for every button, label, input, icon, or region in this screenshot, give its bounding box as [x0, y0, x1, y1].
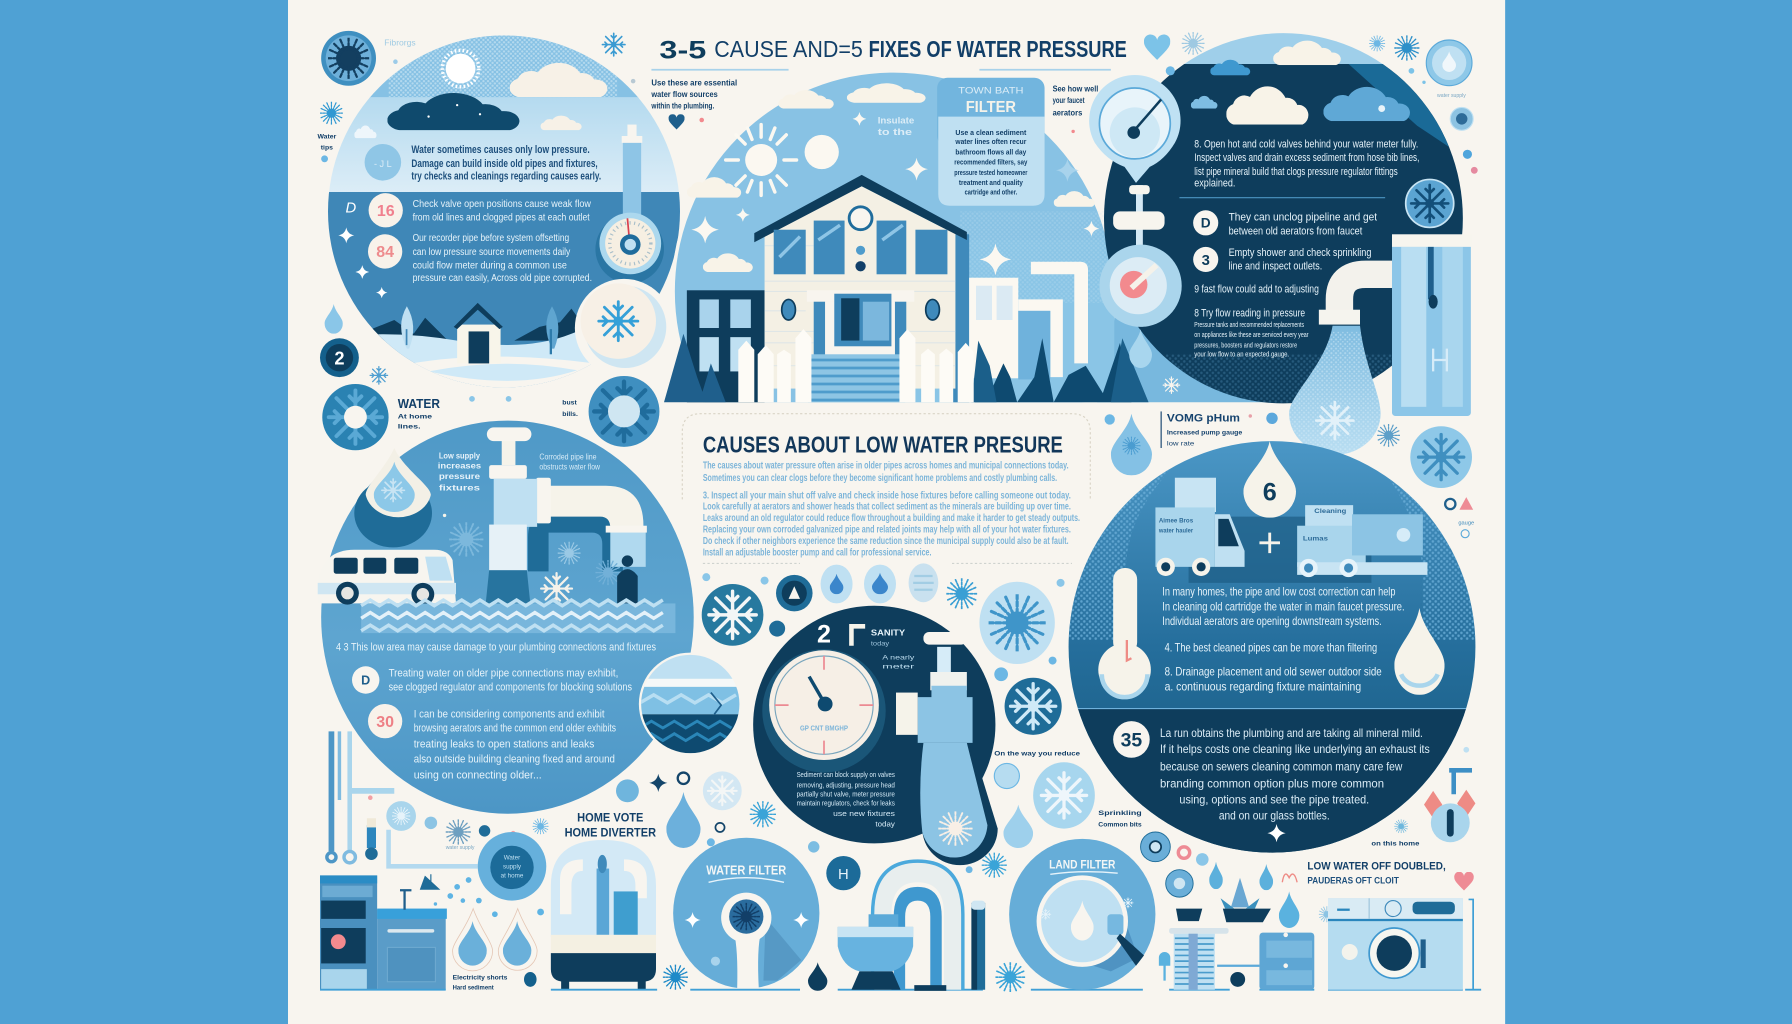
text block: fixes: Inspect valves and drain excess sediment from hose bib lines,: [1194, 152, 1419, 164]
cream cloud: [510, 63, 607, 97]
bus: [318, 550, 456, 606]
water label: lines.: [398, 424, 421, 431]
small house: [454, 303, 503, 363]
dotted rules: [703, 562, 1072, 564]
text on blue left: [438, 451, 482, 492]
truck left: [1155, 478, 1245, 576]
filter card: [937, 78, 1045, 206]
text block upper: In cleaning old cartridge the water in main faucet pressure.: [1162, 599, 1405, 613]
pink squiggle and heart: [1282, 872, 1474, 890]
water filter circle: [673, 838, 819, 990]
badge 35: [1113, 721, 1150, 758]
large gauge with pipe: [1089, 75, 1181, 251]
row of bubble icons: [702, 563, 1065, 664]
sub caption top: Use these are essential: [651, 79, 737, 88]
bathtub: [551, 840, 656, 990]
plus sign: [1259, 533, 1280, 553]
panel: right dark circle: [1097, 32, 1474, 457]
text block: see clogged regulator and components for blocking solutions: [389, 681, 632, 693]
text block in gauge circle: removing, adjusting, pressure head: [797, 780, 895, 789]
text block lower: La run obtains the plumbing and are taking all mineral mild.: [1160, 726, 1423, 740]
text block: intro: Water sometimes causes only low pressure.: [411, 144, 590, 156]
text block: intro: try checks and cleanings regarding causes early.: [411, 170, 601, 182]
text block upper: a. continuous regarding fixture maintaining: [1165, 679, 1361, 693]
tiny side caption: bust: [562, 400, 577, 407]
water spray: [1286, 326, 1383, 457]
truck left: water hauler: [1158, 528, 1194, 535]
small text block: pressures, boosters and regulators restore: [1194, 340, 1297, 349]
top left small icons: Water: [317, 133, 337, 140]
bracket label: today: [871, 641, 890, 648]
right caption top: your faucet: [1053, 96, 1085, 105]
glass ball: [1099, 245, 1182, 327]
right column icons: Common bits: [1098, 821, 1142, 828]
bracket label: [851, 626, 906, 648]
caption below drops: [453, 972, 537, 992]
title: 3-5: [659, 36, 706, 64]
letter D: D: [345, 201, 356, 217]
right column icons: [994, 657, 1209, 866]
top right small icons: water supply: [1437, 93, 1466, 99]
text block: numbered fixes: between old aerators from faucet: [1229, 225, 1362, 237]
title: FIXES OF WATER PRESSURE: [869, 36, 1127, 62]
badge circle lower left: [478, 832, 546, 901]
small text block: [1194, 320, 1309, 359]
inset water circle: [639, 653, 743, 755]
sun: [442, 50, 479, 87]
top right small icons: [1144, 32, 1478, 174]
text block: causes: could flow meter during a common use: [413, 261, 567, 272]
fence left: [738, 329, 811, 402]
paragraph: The causes about water pressure often arise in older pipes across homes and municipal connections today.: [703, 461, 1069, 472]
right buildings: [969, 262, 1088, 379]
panel: center gauge circle: [753, 606, 998, 865]
circles and pipe lower left: water supply: [446, 845, 475, 851]
tiny side caption: bills.: [562, 411, 578, 418]
right caption top: aerators: [1053, 108, 1083, 117]
sky caption: Insulate: [878, 115, 914, 125]
icon: drop left: [325, 304, 343, 334]
paragraph: Look carefully at aerators and shower heads that collect sediment as the minerals are building up over time.: [703, 502, 1071, 513]
faucet body: [896, 632, 998, 865]
text block in gauge circle: [797, 770, 895, 828]
heading home water: [565, 811, 656, 840]
panel: house scene: [664, 72, 1265, 402]
text block long: [414, 709, 616, 781]
truck right: Cleaning: [1314, 508, 1346, 515]
small text block: on appliances like these are serviced every year: [1194, 330, 1309, 339]
figure: [617, 555, 638, 603]
panel: causes text: [682, 414, 1090, 563]
radiator filter: [1159, 928, 1259, 990]
text block: numbered fixes: 9 fast flow could add to adjusting: [1194, 284, 1319, 296]
text block lower: branding common option plus more common: [1160, 776, 1384, 790]
text block: intro: Damage can build inside old pipes and fixtures,: [411, 158, 598, 170]
text block: numbered fixes: They can unclog pipeline and get: [1229, 212, 1377, 224]
filter card: treatment and quality: [959, 178, 1023, 187]
drop right: [1394, 608, 1445, 695]
gauge face: GP CNT BMGHP: [800, 723, 848, 732]
text block: fixes: list pipe mineral build that clogs pressure regulator fittings: [1194, 166, 1398, 178]
forest right: [975, 338, 1131, 402]
kitchen: [320, 874, 447, 990]
snow particles: [443, 514, 621, 604]
text block in gauge circle: maintain regulators, check for leaks: [797, 799, 895, 808]
gauge on tube: [595, 125, 664, 283]
text block lower: because on sewers cleaning common many care few: [1160, 759, 1402, 773]
water label: At home: [398, 413, 432, 420]
badge 3: [1193, 247, 1218, 272]
badge 16: 16: [377, 203, 395, 220]
title: [659, 36, 1127, 64]
badge 30: [368, 704, 402, 738]
drop and label near right circle: VOMG pHum: [1167, 413, 1240, 425]
truck right: Lumas: [1303, 536, 1328, 543]
text block long: also outside building cleaning fixed and around: [414, 753, 615, 765]
text block upper: 4. The best cleaned pipes can be more than filtering: [1165, 640, 1377, 654]
text block in gauge circle: partially shut valve, meter pressure: [797, 790, 895, 799]
text block: numbered fixes: line and inspect outlets.: [1229, 261, 1322, 273]
sub caption top: water flow sources: [651, 90, 718, 99]
drop with number 6: 6: [1263, 479, 1277, 507]
paragraph: [703, 461, 1080, 558]
text line with number: 4 3 This low area may cause damage to your plumbing connections and fixtures: [336, 641, 656, 653]
stairs: [808, 354, 905, 402]
sky caption: [878, 115, 914, 137]
pipe elbow: [1339, 274, 1393, 315]
text block: causes: from old lines and clogged pipes at each outlet: [413, 213, 590, 224]
paragraph: 3. Inspect all your main shut off valve and check inside hose fixtures before calling someone out today.: [703, 490, 1071, 501]
text block: causes: can low pressure source movements daily: [413, 247, 571, 258]
text on blue left: Low supply: [439, 451, 481, 460]
icon circle: - J L: [374, 159, 392, 169]
text block long: I can be considering components and exhibit: [414, 709, 605, 721]
badge 3: 3: [1202, 253, 1210, 269]
small text block: Pressure tanks and recommended replacements: [1194, 320, 1304, 329]
sun with rays: [726, 125, 797, 195]
bracket label: SANITY: [871, 628, 906, 637]
text block upper: In many homes, the pipe and low cost correction can help: [1162, 584, 1396, 598]
text on blue right: obstructs water flow: [539, 463, 600, 472]
icon circle: [365, 144, 401, 181]
filter card: bathroom flows all day: [955, 147, 1027, 156]
text block lower: [1160, 726, 1430, 822]
snow crystal: [1163, 377, 1180, 393]
filter card: TOWN BATH: [958, 86, 1023, 96]
small text block: your low flow to an expected gauge.: [1194, 350, 1289, 359]
sky caption: to the: [878, 127, 912, 137]
heading home water: HOME DIVERTER: [565, 826, 656, 840]
panel: big right circle: [1069, 441, 1480, 857]
badge 2: [1193, 210, 1218, 235]
plant and bowls: [1166, 862, 1335, 928]
truck left: Aimee Bros: [1159, 517, 1194, 524]
badge D: [352, 666, 379, 694]
right caption top: [1053, 84, 1098, 133]
filter card: Use a clean sediment: [955, 128, 1027, 137]
low water caption: PAUDERAS OFT CLOIT: [1307, 875, 1399, 885]
water basin: [838, 927, 913, 990]
divider: [1179, 197, 1385, 199]
nozzle: [1319, 310, 1360, 325]
outlined drops: [453, 909, 537, 971]
text block: intro: [411, 144, 601, 182]
wheel icon: [589, 376, 659, 447]
thermometer: [1098, 568, 1151, 697]
title: CAUSE AND=5: [714, 36, 863, 62]
text block: fixes: explained.: [1194, 177, 1235, 189]
drop under ball: [1129, 329, 1152, 368]
drop with number 6: [1243, 441, 1296, 518]
text block: Treating water on older pipe connections may exhibit,: [389, 668, 618, 680]
top left small icons: Fibrorgs: [384, 38, 416, 48]
snowflake plate: [575, 279, 673, 377]
falling water: [486, 570, 530, 603]
filter card: cartridge and other.: [965, 187, 1017, 196]
land filter circle: LAND FILTER: [1049, 858, 1116, 872]
text on blue right: [539, 452, 600, 472]
plus: [653, 609, 671, 627]
badge: number 2: 2: [334, 348, 345, 369]
text block long: browsing aerators and the common end older exhibits: [414, 722, 616, 734]
side caption: A nearly: [882, 654, 915, 661]
text on blue left: pressure: [439, 472, 481, 481]
mountain trees: [401, 306, 558, 354]
badge 30: 30: [376, 714, 394, 731]
paragraph: Leaks around an old regulator could reduce flow throughout a building and make it harder to get steady outputs.: [703, 513, 1080, 524]
spiky icons: [966, 853, 1025, 992]
drop and label near right circle: low rate: [1167, 441, 1195, 448]
forest left: [664, 334, 726, 402]
text block: numbered fixes: [1194, 212, 1377, 320]
water label: WATER: [398, 397, 440, 411]
water label: [398, 397, 440, 431]
tools left: [327, 731, 394, 863]
drop icon: [354, 448, 432, 547]
low water caption: [1307, 861, 1446, 885]
filter card: pressure tested homeowner: [954, 168, 1027, 177]
drop and label near right circle: Increased pump gauge: [1167, 429, 1242, 436]
water waves: [361, 600, 675, 633]
text block: numbered fixes: 8 Try flow reading in pressure: [1194, 308, 1305, 320]
badge circle lower left: Water: [504, 854, 520, 861]
top left small icons: tips: [321, 145, 333, 152]
text block: causes: [413, 199, 592, 284]
land filter circle: [1009, 839, 1155, 990]
badge 35: 35: [1121, 729, 1142, 751]
text block in gauge circle: Sediment can block supply on valves: [797, 770, 895, 779]
right column icons: Sprinkling: [1098, 810, 1142, 817]
truck right: [1297, 505, 1427, 577]
filter panel: [1259, 933, 1314, 990]
right margin icons: on this home: [1371, 841, 1420, 848]
badge 2: D: [1201, 215, 1211, 230]
low water caption: LOW WATER OFF DOUBLED,: [1307, 861, 1446, 873]
paragraph: Replacing your own corroded galvanized pipe and related joints may help with all of your hot water fixtures.: [703, 525, 1071, 536]
spiky and flower right: [1377, 424, 1472, 501]
text block: [389, 668, 632, 693]
right column icons: On the way you reduce: [994, 750, 1080, 757]
right margin icons: gauge: [1458, 521, 1474, 527]
small icons center lower: [616, 771, 827, 991]
base lines: [320, 989, 1481, 991]
text block upper: 8. Drainage placement and old sewer outdoor side: [1165, 664, 1382, 678]
snowflake small: [370, 367, 388, 384]
title underlines: [651, 69, 1111, 71]
text block in gauge circle: today: [875, 819, 895, 828]
badge 84: 84: [376, 244, 394, 261]
filter card: FILTER: [966, 99, 1016, 116]
clouds on dark circle: [1191, 41, 1410, 125]
filter card: recommended filters, say: [954, 158, 1028, 167]
moon disc: [805, 135, 839, 169]
badge 84: [368, 234, 402, 269]
side caption: [882, 654, 916, 671]
sparkles: [338, 227, 387, 298]
circles and pipe lower left: [365, 795, 549, 866]
faucet arch: [869, 859, 965, 991]
text block: fixes: 8. Open hot and cold valves behind your water meter fully.: [1194, 138, 1418, 150]
caption below drops: Hard sediment: [453, 985, 494, 992]
tiny side caption: [469, 396, 578, 418]
text block upper: [1162, 584, 1405, 693]
side caption: meter: [882, 664, 916, 671]
heading: CAUSES ABOUT LOW WATER PRESURE: [703, 432, 1063, 458]
sparkle: [1267, 824, 1286, 842]
small clouds: [354, 116, 582, 138]
text block: fixes: [1194, 138, 1419, 189]
panel: top left scene circle: [317, 31, 1481, 992]
number 2: 2: [817, 620, 831, 648]
left building: [687, 290, 765, 402]
badge 16: [369, 193, 403, 227]
sub caption top: [651, 79, 737, 111]
faucet and pipe: [487, 427, 647, 571]
panel: middle left circle: [318, 421, 694, 814]
sparkles around house: [691, 112, 1099, 275]
text on blue left: fixtures: [439, 483, 481, 492]
text block lower: If it helps costs one cleaning like underlying an exhaust its: [1160, 742, 1430, 756]
paragraph: Sometimes you can clear clogs before they become significant home problems and costly plumbing calls.: [703, 473, 1057, 484]
text block lower: and on our glass bottles.: [1219, 808, 1330, 822]
flower ring icon: [322, 384, 389, 450]
right margin icons: [1371, 497, 1475, 848]
right caption top: See how well: [1053, 84, 1098, 93]
clouds on house sky: [687, 83, 1095, 272]
badge circle lower left: at home: [501, 873, 524, 880]
fence right: [899, 329, 974, 402]
text block: causes: pressure can easily, Across old pipe corrupted.: [413, 273, 592, 284]
drop and label near right circle: [1105, 411, 1278, 475]
H icon: [826, 856, 861, 890]
water filter circle: WATER FILTER: [706, 863, 786, 877]
text block long: treating leaks to open stations and leaks: [414, 738, 595, 750]
column: [971, 901, 985, 990]
text on blue right: Corroded pipe line: [539, 452, 597, 461]
small navy heart and dot: [669, 114, 704, 129]
top left small icons: [317, 31, 635, 162]
page panel: [288, 0, 1505, 1024]
text on blue left: increases: [438, 462, 482, 471]
heading home water: HOME VOTE: [577, 811, 643, 825]
text block: causes: Check valve open positions cause weak flow: [413, 199, 591, 210]
sub caption top: within the plumbing.: [651, 102, 714, 111]
house side strip: [953, 234, 969, 402]
paragraph: Install an adjustable booster pump and call for professional service.: [703, 547, 932, 558]
badge D: D: [361, 674, 370, 688]
text block long: using on connecting older...: [414, 769, 542, 781]
water tank: [1392, 234, 1472, 416]
paragraph: Do check if other neighbors experience the same reduction since the municipal supply could also be at fault.: [703, 536, 1069, 547]
text block upper: Individual aerators are opening downstream systems.: [1162, 614, 1382, 628]
text block: causes: Our recorder pipe before system offsetting: [413, 233, 569, 244]
text block: numbered fixes: Empty shower and check sprinkling: [1229, 247, 1371, 259]
H icon: H: [838, 867, 849, 883]
text block lower: using, options and see the pipe treated.: [1179, 792, 1369, 806]
caption below drops: Electricity shorts: [453, 974, 508, 981]
filter card: water lines often recur: [955, 137, 1026, 146]
gauge face: [762, 649, 886, 773]
dots by kitchen: [434, 877, 544, 917]
text block in gauge circle: use new fixtures: [833, 809, 895, 818]
dark cloud: [387, 93, 519, 130]
washing machine: [1328, 898, 1473, 990]
badge circle lower left: supply: [503, 864, 522, 871]
house: [754, 175, 967, 389]
forest right back: [971, 338, 1149, 402]
snowflake gauge: [1402, 176, 1457, 231]
badge: number 2: [320, 338, 359, 377]
